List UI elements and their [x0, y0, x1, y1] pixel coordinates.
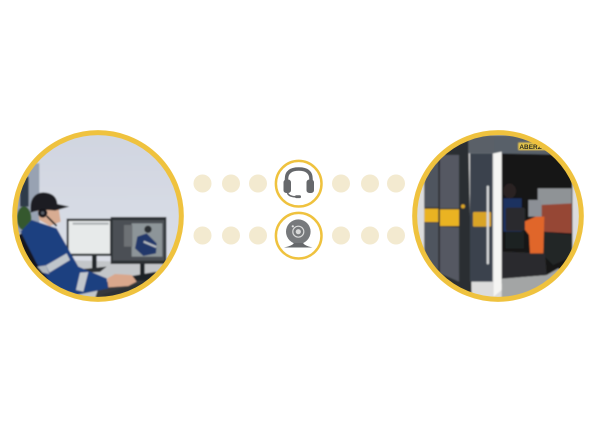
dots: top-left row: [194, 174, 267, 192]
dots: bottom-right row: [332, 226, 405, 244]
icon: headset: [276, 161, 322, 206]
ring: [415, 133, 581, 299]
dots: top-right row: [332, 174, 405, 192]
cabin brand sign: ABERZY: [519, 144, 547, 151]
ring: [15, 133, 181, 299]
infographic diagram: [12, 130, 584, 302]
dots: bottom-left row: [194, 226, 267, 244]
photo: operator at monitors: [10, 130, 187, 303]
photo: simulator cabin: [412, 130, 585, 303]
icon: webcam: [276, 213, 322, 258]
